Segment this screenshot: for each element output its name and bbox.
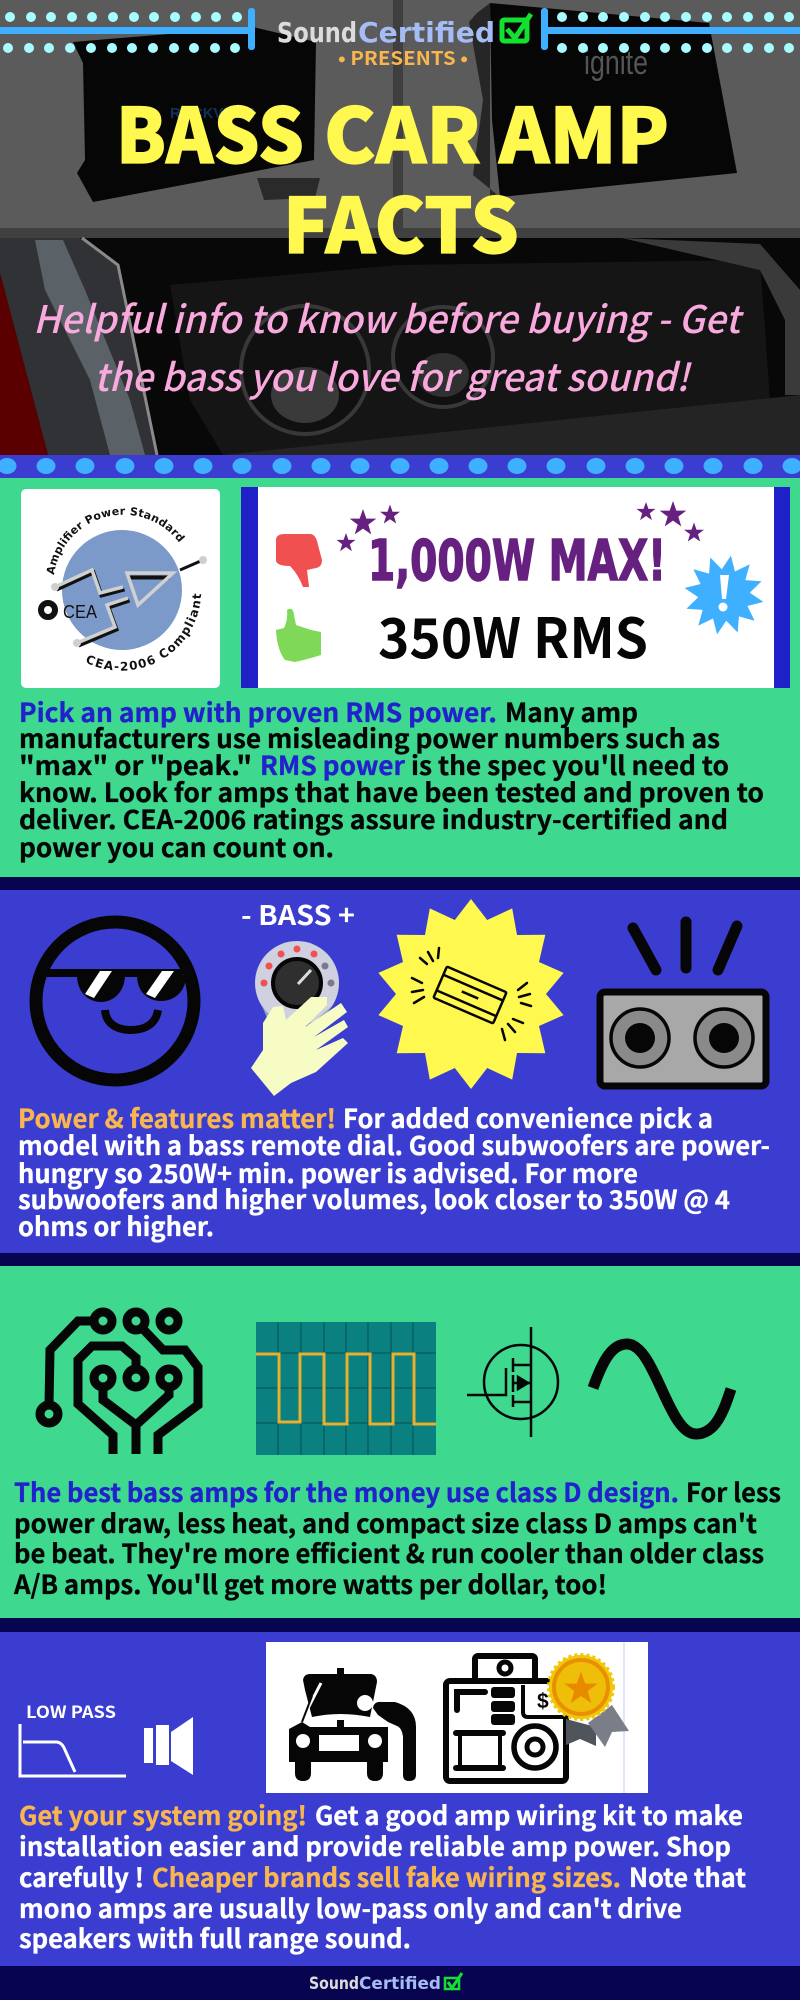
top decorative dots and lines, left: [0, 8, 255, 53]
icon: award rosette: [549, 1655, 629, 1747]
header photo: amplifiers: ignite: [584, 44, 648, 82]
subtitle: [33, 289, 745, 402]
text block: power and features: model with a bass remote dial. Good subwoofers are power-: [18, 1126, 770, 1163]
header photo: amplifiers: ROCKVILLE: [170, 105, 255, 122]
text block: get your system going: Note that: [629, 1858, 746, 1895]
text block: RMS power: know. Look for amps that have been tested and proven to: [19, 773, 764, 810]
icon: car with mechanic: [289, 1668, 416, 1781]
text block: power and features: ohms or higher.: [18, 1207, 214, 1244]
text block: get your system going: carefully !: [19, 1858, 144, 1895]
icon: subwoofer box: [600, 922, 766, 1086]
icon: bass dial with hand: [251, 941, 348, 1096]
title: [116, 75, 669, 275]
icon: thumbs down: [276, 534, 322, 587]
panel: get your system going: [0, 1632, 800, 1966]
text block: class D design: For less: [686, 1473, 781, 1510]
text block: power and features: hungry so 250W+ min. power is advised. For more: [18, 1154, 638, 1191]
footer: Sound: [309, 1974, 359, 1994]
text block: power and features: [18, 1099, 770, 1244]
icon: face with sunglasses: [36, 922, 194, 1080]
icon: sine wave: [593, 1344, 731, 1434]
text block: power and features: subwoofers and higher volumes, look closer to 350W @ 4: [18, 1180, 730, 1217]
text block: power and features: For added convenience pick a: [343, 1099, 713, 1136]
footer: [0, 1966, 800, 2000]
icon: CEA-2006 badge: Amplifier Power Standard: [46, 507, 186, 575]
text block: RMS power: deliver. CEA-2006 ratings assure industry-certified and: [19, 800, 728, 837]
divider band: [0, 877, 800, 890]
panel: RMS power: [0, 478, 800, 877]
text block: get your system going: speakers with full range sound.: [19, 1919, 411, 1956]
panel: max vs RMS comparison: [241, 487, 790, 688]
subtitle: Helpful info to know before buying - Get: [33, 289, 745, 344]
presents label: • PRESENTS •: [338, 44, 468, 71]
subtitle: the bass you love for great sound!: [94, 347, 692, 402]
text block: RMS power: [19, 693, 764, 865]
title: FACTS: [283, 165, 519, 275]
text block: RMS power: is the spec you'll need to: [411, 746, 729, 783]
icon: amplifier with price tag: [446, 1656, 566, 1781]
panel: class D design: [0, 1266, 800, 1618]
label: 1,000W MAX: 1,000W MAX!: [368, 529, 666, 594]
text block: RMS power: Pick an amp with proven RMS power.: [19, 693, 497, 730]
text block: get your system going: Get a good amp wiring kit to make: [315, 1796, 743, 1833]
text block: get your system going: Cheaper brands sell fake wiring sizes.: [152, 1858, 621, 1895]
divider band: [0, 1618, 800, 1632]
icon: circuit traces: [40, 1312, 198, 1454]
text block: get your system going: installation easier and provide reliable amp power. Shop: [19, 1827, 731, 1864]
header photo: car trunk with subwoofers: [0, 238, 800, 455]
label: low pass: LOW PASS: [26, 1699, 116, 1723]
icon: MOSFET symbol: [467, 1327, 558, 1437]
chart: low pass curve: [20, 1724, 126, 1776]
logo: SoundCertified: Sound: [277, 16, 357, 49]
chart: oscilloscope square wave: [256, 1322, 436, 1455]
dotted divider band: [0, 455, 800, 478]
footer: Certified: [359, 1974, 441, 1994]
icon: CEA-2006 badge: CEA-2006 Compliant: [86, 594, 202, 671]
icon: speaker: [144, 1717, 193, 1775]
icon: CEA-2006 badge: CEA: [63, 602, 97, 622]
icon: blue exclamation burst: [678, 549, 770, 641]
text block: class D design: power draw, less heat, and compact size class D amps can't: [14, 1504, 757, 1541]
panel: header: [0, 0, 800, 455]
label: bass: - BASS +: [241, 894, 355, 933]
text block: RMS power: Many amp: [505, 693, 638, 730]
icon: amplifier with price tag: $: [537, 1690, 549, 1713]
label: 350W RMS: 350W RMS: [378, 594, 648, 674]
logo: SoundCertified: [277, 14, 531, 49]
icon: thumbs up: [276, 609, 321, 662]
panel: power and features: [0, 890, 800, 1253]
text block: class D design: The best bass amps for the money use class D design.: [14, 1473, 679, 1510]
icon: purple stars: [336, 501, 704, 551]
text block: RMS power: RMS power: [260, 746, 406, 783]
icon: CEA-2006 badge: [21, 489, 220, 688]
text block: get your system going: Get your system going!: [19, 1796, 307, 1833]
icon: yellow burst with amp: [378, 899, 564, 1089]
text block: RMS power: "max" or "peak.": [19, 746, 252, 783]
text block: class D design: be beat. They're more efficient & run cooler than older class: [14, 1534, 764, 1571]
title: CAR: [324, 75, 481, 185]
text block: power and features: Power & features matter!: [18, 1099, 336, 1136]
header photo: amplifiers: [0, 0, 800, 238]
text block: RMS power: manufacturers use misleading power numbers such as: [19, 719, 720, 756]
title: AMP: [498, 75, 669, 185]
divider band: [0, 1253, 800, 1266]
top decorative dots and lines, right: [541, 8, 800, 53]
text block: class D design: [13, 1473, 781, 1602]
title: BASS: [116, 75, 304, 185]
text block: get your system going: mono amps are usually low-pass only and can't drive: [19, 1889, 682, 1926]
text block: RMS power: power you can count on.: [19, 828, 334, 865]
logo: SoundCertified: Certified: [358, 16, 495, 49]
panel: installation icons: [266, 1642, 648, 1793]
text block: get your system going: [19, 1796, 746, 1956]
text block: class D design: A/B amps. You'll get more watts per dollar, too!: [13, 1565, 607, 1602]
